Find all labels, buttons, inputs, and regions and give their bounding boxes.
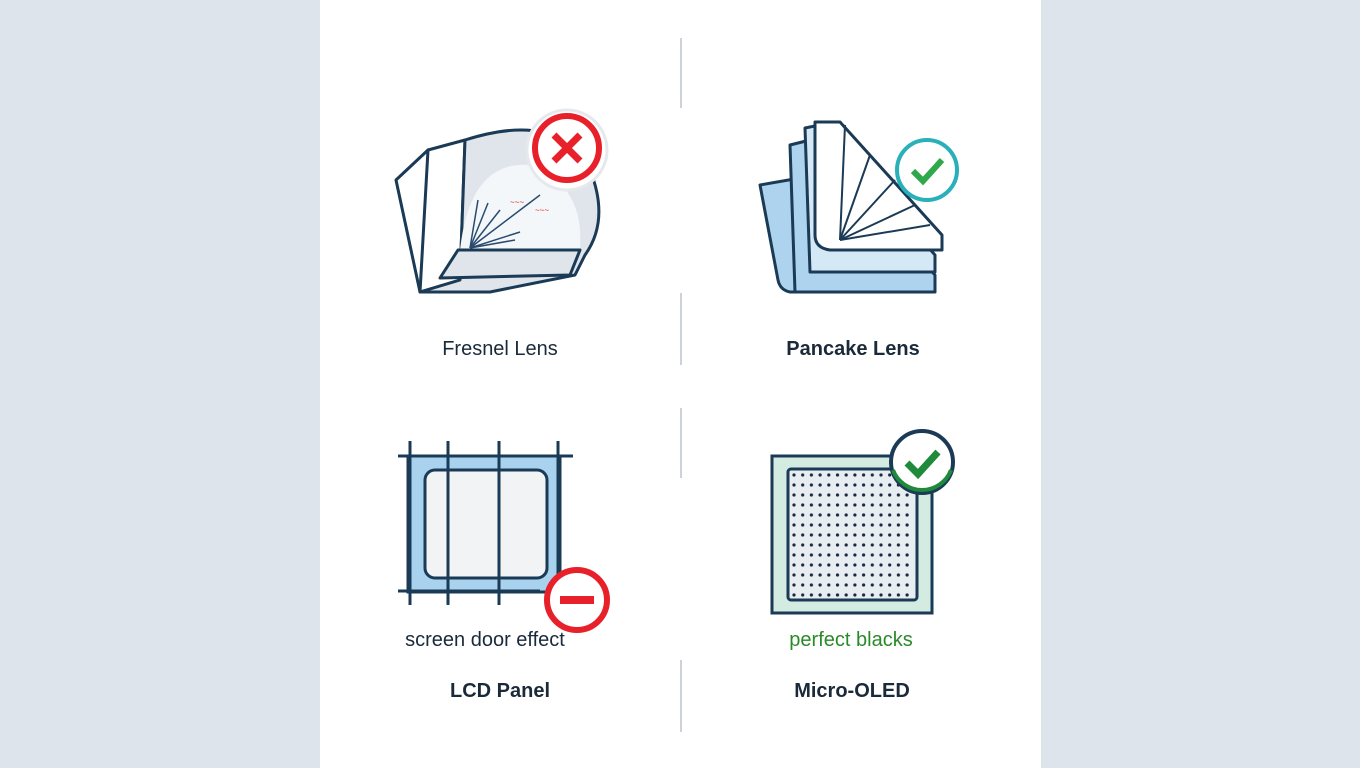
- caption: screen door effect: screen door effect: [405, 629, 565, 651]
- icon: LCD panel: [398, 441, 573, 605]
- label: Fresnel Lens: Fresnel Lens: [442, 338, 558, 360]
- icon: green check badge: [891, 431, 953, 493]
- icon: fresnel lens: [396, 130, 599, 292]
- label: LCD Panel: LCD Panel: [450, 680, 550, 702]
- icon: micro-OLED: [772, 456, 932, 613]
- caption: perfect blacks: perfect blacks: [789, 629, 913, 651]
- label: Pancake Lens: Pancake Lens: [786, 338, 920, 360]
- label: Micro-OLED: Micro-OLED: [794, 680, 910, 702]
- background panel: [320, 0, 1041, 768]
- icon: pancake lens: [760, 122, 942, 292]
- icon: fresnel lens: ~~~: [510, 198, 524, 207]
- icon: red X badge: [527, 110, 607, 190]
- icon: red minus badge: [547, 570, 607, 630]
- icon: fresnel lens: ~~~: [535, 206, 549, 215]
- icon: teal check badge: [897, 140, 957, 200]
